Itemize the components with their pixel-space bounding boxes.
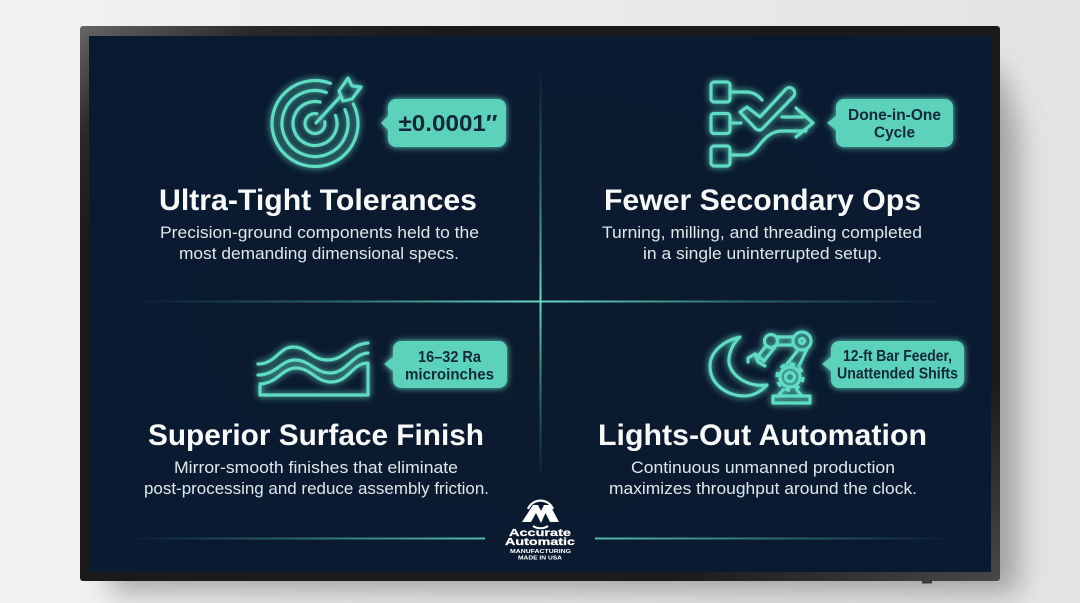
screen [89,36,991,572]
monitor frame [80,26,1000,581]
callout: tolerance: ±0.0001″ [398,110,498,136]
description: in a single uninterrupted setup. [643,245,882,263]
heading: Ultra-Tight Tolerances [159,184,477,217]
monitor drop shadow [110,70,1018,592]
monitor [80,26,1000,584]
heading: Lights-Out Automation [598,419,927,452]
description: Precision-ground components held to the [160,224,479,242]
logo wordmark: MADE IN USA [518,556,562,562]
callout: bar feeder: Unattended Shifts [837,366,958,382]
bottom rule right [595,538,955,540]
description [602,224,922,263]
logo mark [522,501,559,528]
logo wordmark: Accurate [509,527,571,539]
vertical divider [540,68,542,480]
panel: lights-out automation [598,332,964,498]
description [160,224,479,263]
description: post-processing and reduce assembly friction. [144,480,489,498]
description: Turning, milling, and threading completed [602,224,922,242]
heading: Superior Surface Finish [148,419,484,452]
description [144,459,489,498]
description: Mirror-smooth finishes that eliminate [174,459,458,477]
description: most demanding dimensional specs. [179,245,459,263]
monitor button [922,581,932,584]
callout: done-in-one: Cycle [874,124,915,142]
logo wordmark: Automatic [505,536,575,548]
bottom rule left [125,538,485,540]
panel: fewer secondary ops [602,82,953,263]
callout: done-in-one [827,99,953,147]
icon: target with arrow [257,66,373,181]
panel: ultra-tight tolerances [159,66,506,263]
callout: tolerance [381,99,506,147]
logo: accurate automatic manufacturing [505,501,575,562]
callout: bar feeder: 12-ft Bar Feeder, [843,348,952,365]
heading: Fewer Secondary Ops [604,184,921,217]
description [609,459,917,498]
panel: superior surface finish [144,341,507,498]
description: Continuous unmanned production [631,459,895,477]
horizontal divider [130,300,950,302]
icon: moon and robot arm [710,332,811,403]
callout: done-in-one: Done-in-One [848,107,941,124]
callout: surface finish value: 16–32 Ra [418,349,481,366]
icon: surface waves [258,343,368,395]
callout: bar feeder [822,341,964,388]
description: maximizes throughput around the clock. [609,480,917,498]
callout: surface finish value: microinches [405,366,494,384]
logo wordmark: MANUFACTURING [510,549,571,555]
logo wordmark [505,527,575,562]
icon: process flow with checkmark [711,82,813,166]
callout: surface finish value [384,341,507,388]
